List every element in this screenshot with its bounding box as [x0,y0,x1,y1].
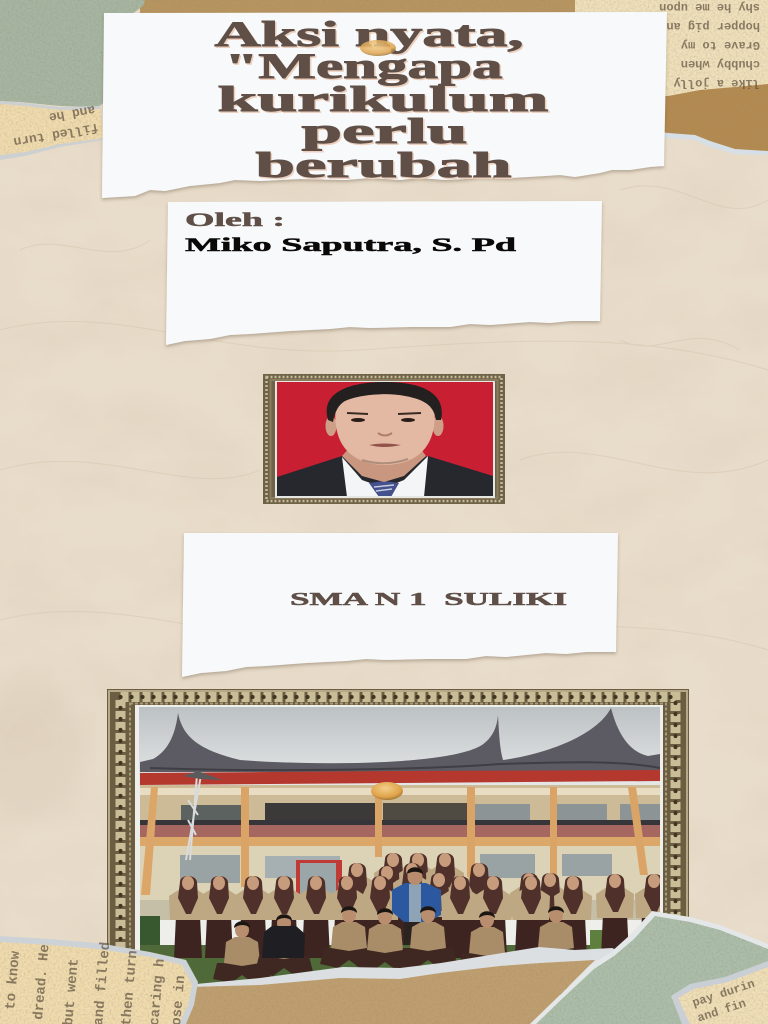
hedge and grass [140,900,660,920]
newspaper words [3,941,189,1024]
torn paper: left newspaper scrap: and he [48,102,96,125]
portrait photo [277,382,493,497]
torn paper: left newspaper scrap [0,101,104,160]
decorative orange disc on photo [371,782,403,800]
upper floor wall [140,785,660,820]
panel: author torn paper [166,201,602,345]
school photo [139,707,673,995]
students seated front row [213,921,271,983]
maroon parapet [140,825,660,837]
title line: perlu: perlu [303,112,469,152]
torn edge: top-right white strip [655,131,768,155]
title line: Aksi nyata: Aksi nyata, [214,14,524,54]
torn paper: bottom-right newspaper: pay durin [691,977,757,1010]
torn paper: bottom-right newspaper [671,961,768,1024]
torn paper: top-right newspaper: hopper pig and [659,19,760,33]
title line: Aksi nyata [214,14,525,56]
torn paper: top-right wood brown [655,80,768,152]
title line: Aksi nyata: Aksi nyata, [216,16,525,56]
torn paper: top-right newspaper: like a jolly [674,76,760,90]
title line: berubah: berubah [257,146,513,186]
decorative orange bead on title [360,40,396,56]
school name: SMA N 1 SULIKI [290,589,567,609]
teacher in blue batik shirt [392,867,441,945]
author name: Miko Saputra, S. Pd [185,235,517,256]
columns [141,787,158,895]
title line: kurikulum: kurikulum [218,79,549,119]
orange band [140,837,660,846]
title line: Mengapa [224,46,504,88]
red eaves [140,770,660,785]
torn paper: bottom-right green [530,911,768,1024]
balcony rail [140,820,660,825]
sky [139,707,660,787]
torn paper: top-right newspaper: shy he me upon [659,0,760,14]
torn paper: top-left green [0,0,145,107]
students standing row [169,876,207,958]
torn paper: top centre brown [140,0,580,20]
title line: kurikulum: kurikulum [219,80,550,120]
torn paper: top-right newspaper: chubby when [681,57,760,71]
panel: school name torn paper [182,533,618,677]
title line: Mengapa: "Mengapa [224,46,502,86]
torn paper: left newspaper scrap: filled turn [12,120,100,149]
newspaper words: dread. He [31,944,54,1020]
title line: perlu: perlu [302,111,468,151]
torn paper: top-right newspaper [575,0,768,96]
antenna tower [186,775,201,860]
author label: Oleh: Oleh : [185,210,285,231]
newspaper words: to know [3,950,24,1010]
panel: title torn paper [102,12,667,198]
title line: perlu [302,111,469,152]
school photo in ornate frame [107,689,689,995]
torn paper: bottom centre brown [183,960,595,1024]
title line: berubah: berubah [256,145,512,185]
torn paper: top-right newspaper: Grave to my [681,38,760,52]
portrait frame [263,374,505,504]
roof [140,708,660,772]
school photo frame [107,689,689,975]
title text [214,14,550,186]
torn edge: bottom grey strip [196,947,640,1000]
newspaper words: and filled [91,941,114,1024]
title line: kurikulum [218,79,550,120]
lower floor wall [140,846,660,904]
portrait in ornate frame [263,374,505,504]
torn paper: bottom-left newspaper [0,936,198,1024]
title line: berubah [256,145,513,186]
students back row [374,853,404,880]
title line: Mengapa: "Mengapa [226,48,504,88]
